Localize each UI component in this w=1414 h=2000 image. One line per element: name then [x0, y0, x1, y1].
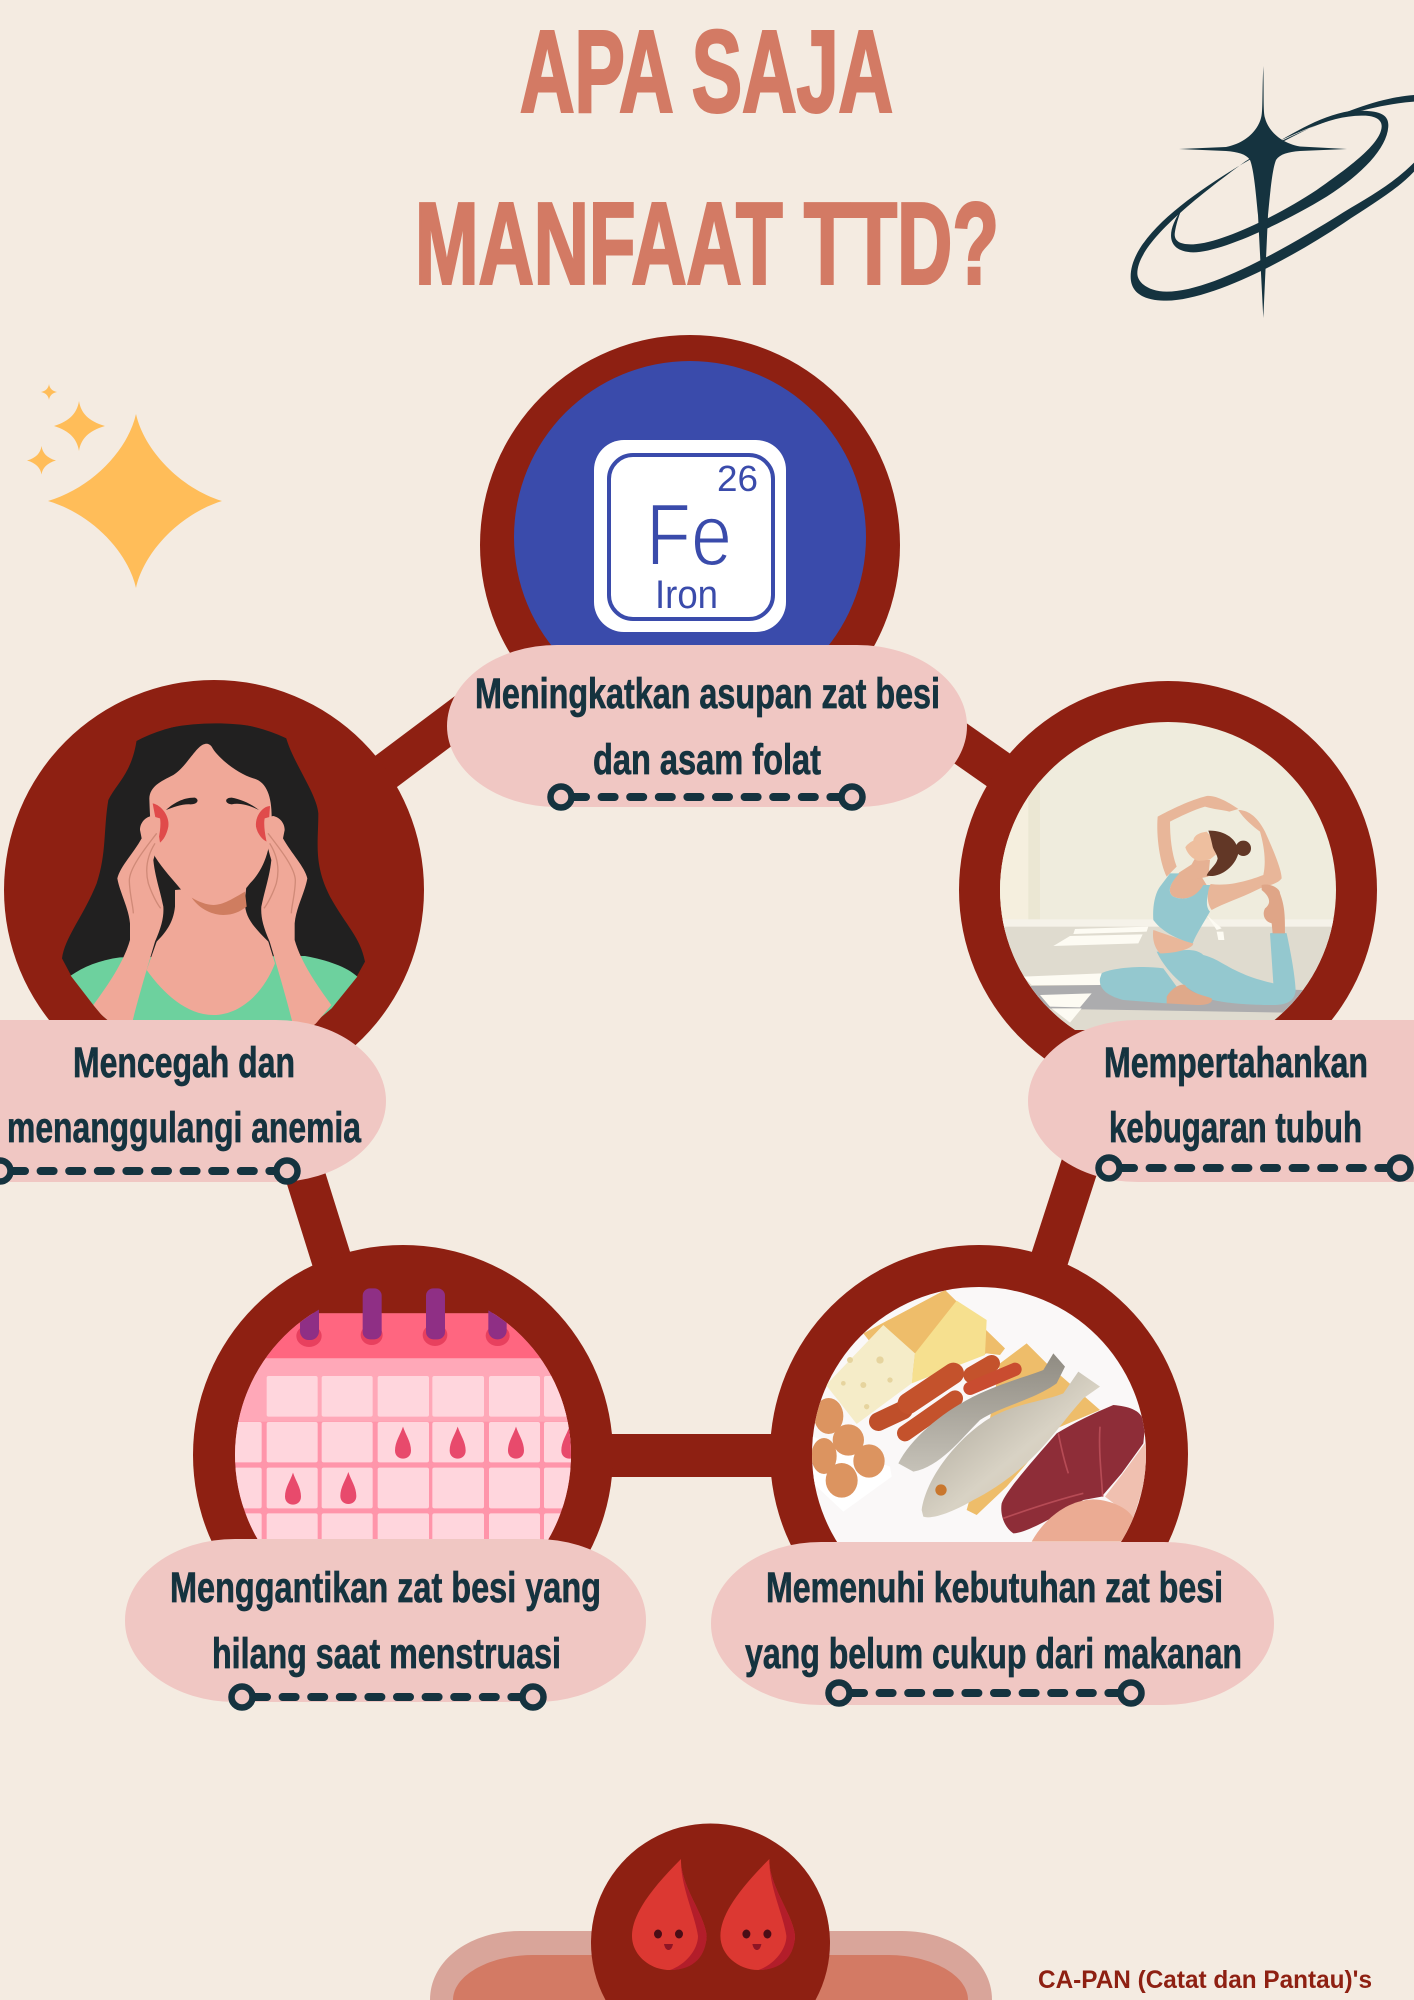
panel: label menstruation	[125, 1539, 646, 1708]
dashed connector	[550, 786, 862, 808]
dashed connector	[232, 1686, 544, 1708]
dashed connector	[0, 1160, 298, 1182]
panel: iron circle	[480, 335, 900, 755]
text: fitness	[1104, 1039, 1368, 1152]
panel: food circle	[771, 1245, 1188, 1546]
text: anemia: menanggulangi anemia	[7, 1104, 362, 1152]
text: anemia: Mencegah dan	[73, 1039, 295, 1087]
text: menstruation: Menggantikan zat besi yang	[170, 1564, 601, 1612]
text: dietary need: yang belum cukup dari makanan	[745, 1630, 1242, 1678]
icon: calendar	[225, 1288, 585, 1547]
text: dietary need	[745, 1564, 1242, 1678]
dashed connector	[828, 1682, 1142, 1704]
icon: woman with headache	[62, 723, 365, 1027]
panel: label iron intake	[447, 645, 967, 808]
icon: blood drop left	[632, 1859, 707, 1970]
icon: iron-rich food	[812, 1287, 1146, 1542]
title: APA SAJA	[520, 6, 893, 136]
icon: navy star with orbit rings	[1131, 66, 1414, 318]
icon: yoga woman scene	[990, 710, 1340, 1030]
text: anemia	[7, 1039, 362, 1152]
panel: label dietary need	[711, 1542, 1274, 1705]
panel: label fitness	[1028, 1020, 1414, 1182]
icon: Fe periodic table card: 26	[717, 458, 758, 499]
icon: Fe periodic table card	[594, 440, 786, 632]
panel: label anemia	[0, 1020, 386, 1182]
icon: Fe periodic table card: Iron	[655, 573, 718, 617]
panel: menstruation calendar circle	[193, 1245, 612, 1550]
icon: blood drops badge	[591, 1823, 830, 2000]
icon: Fe periodic table card: Fe	[646, 485, 732, 584]
dashed connector	[1098, 1158, 1410, 1178]
text: menstruation: hilang saat menstruasi	[212, 1630, 561, 1678]
footer credit: CA-PAN (Catat dan Pantau)'s	[1038, 1966, 1372, 1994]
text: menstruation	[170, 1564, 601, 1678]
connectors between circles	[296, 641, 1088, 1456]
icon: yellow sparkles	[27, 384, 222, 588]
footer tab	[430, 1931, 992, 2000]
text: iron intake: dan asam folat	[593, 736, 821, 784]
title	[415, 6, 999, 308]
text: iron intake: Meningkatkan asupan zat besi	[475, 670, 940, 718]
panel: yoga circle	[959, 681, 1377, 1099]
icon: blood drop right	[720, 1859, 795, 1970]
title: MANFAAT TTD?	[415, 178, 999, 308]
text: dietary need: Memenuhi kebutuhan zat besi	[766, 1564, 1223, 1612]
panel: anemia woman circle	[4, 680, 424, 1045]
text: iron intake	[475, 670, 940, 784]
